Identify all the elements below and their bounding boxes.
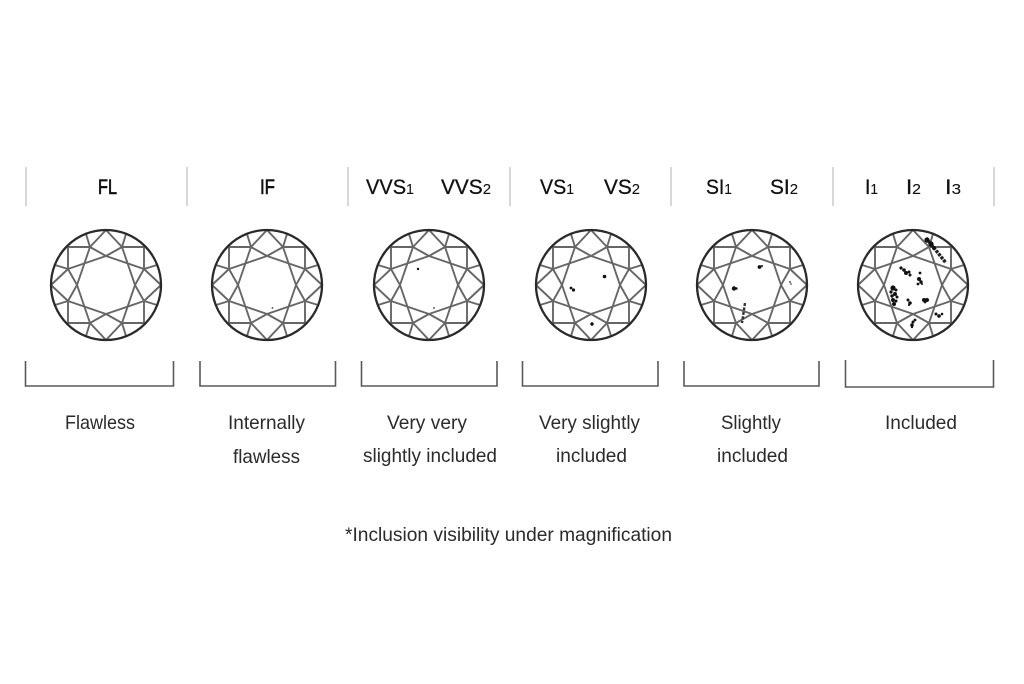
description: Flawless: Flawless — [65, 412, 135, 434]
grade heading: VVS1: VVS1 — [366, 176, 414, 199]
grade heading: SI1: SI1 — [706, 176, 732, 199]
grade heading: IF: IF — [260, 176, 275, 199]
grade heading: VVS2: VVS2 — [441, 176, 491, 199]
description: Slightly included — [717, 412, 788, 467]
grade heading: I2: I2 — [906, 176, 921, 199]
description: Slightly included: Slightly — [721, 412, 781, 434]
diamond: VVS — [374, 230, 484, 340]
description: Very slightly included: Very slightly — [539, 412, 640, 434]
description: Internally flawless — [228, 412, 305, 468]
diamond: SI — [697, 230, 807, 340]
diamond: I, heavy inclusions — [858, 230, 968, 340]
description: Very very slightly included: slightly included — [363, 445, 497, 467]
grade heading: VS2: VS2 — [604, 176, 640, 199]
description: Very very slightly included: Very very — [387, 412, 467, 434]
grade heading: I3: I3 — [945, 176, 961, 199]
grade heading: SI2: SI2 — [770, 176, 798, 199]
description: Internally flawless: Internally — [228, 412, 305, 434]
footnote: *Inclusion visibility under magnification — [345, 524, 672, 546]
diamond: IF — [212, 230, 322, 340]
grade heading: VS1: VS1 — [540, 176, 574, 199]
brackets under diamonds — [26, 360, 994, 387]
description: Slightly included: included — [717, 445, 788, 467]
column separators — [26, 167, 994, 206]
diamond: FL, no inclusions — [51, 230, 161, 340]
description: Very slightly included: included — [556, 445, 627, 467]
grade heading: I1: I1 — [865, 176, 878, 199]
grade heading: FL: FL — [98, 176, 117, 199]
description: Very slightly included — [539, 412, 640, 467]
diamond: VS — [536, 230, 646, 340]
description: Internally flawless: flawless — [233, 446, 300, 468]
description: Included: Included — [885, 412, 957, 434]
description: Very very slightly included — [363, 412, 497, 467]
